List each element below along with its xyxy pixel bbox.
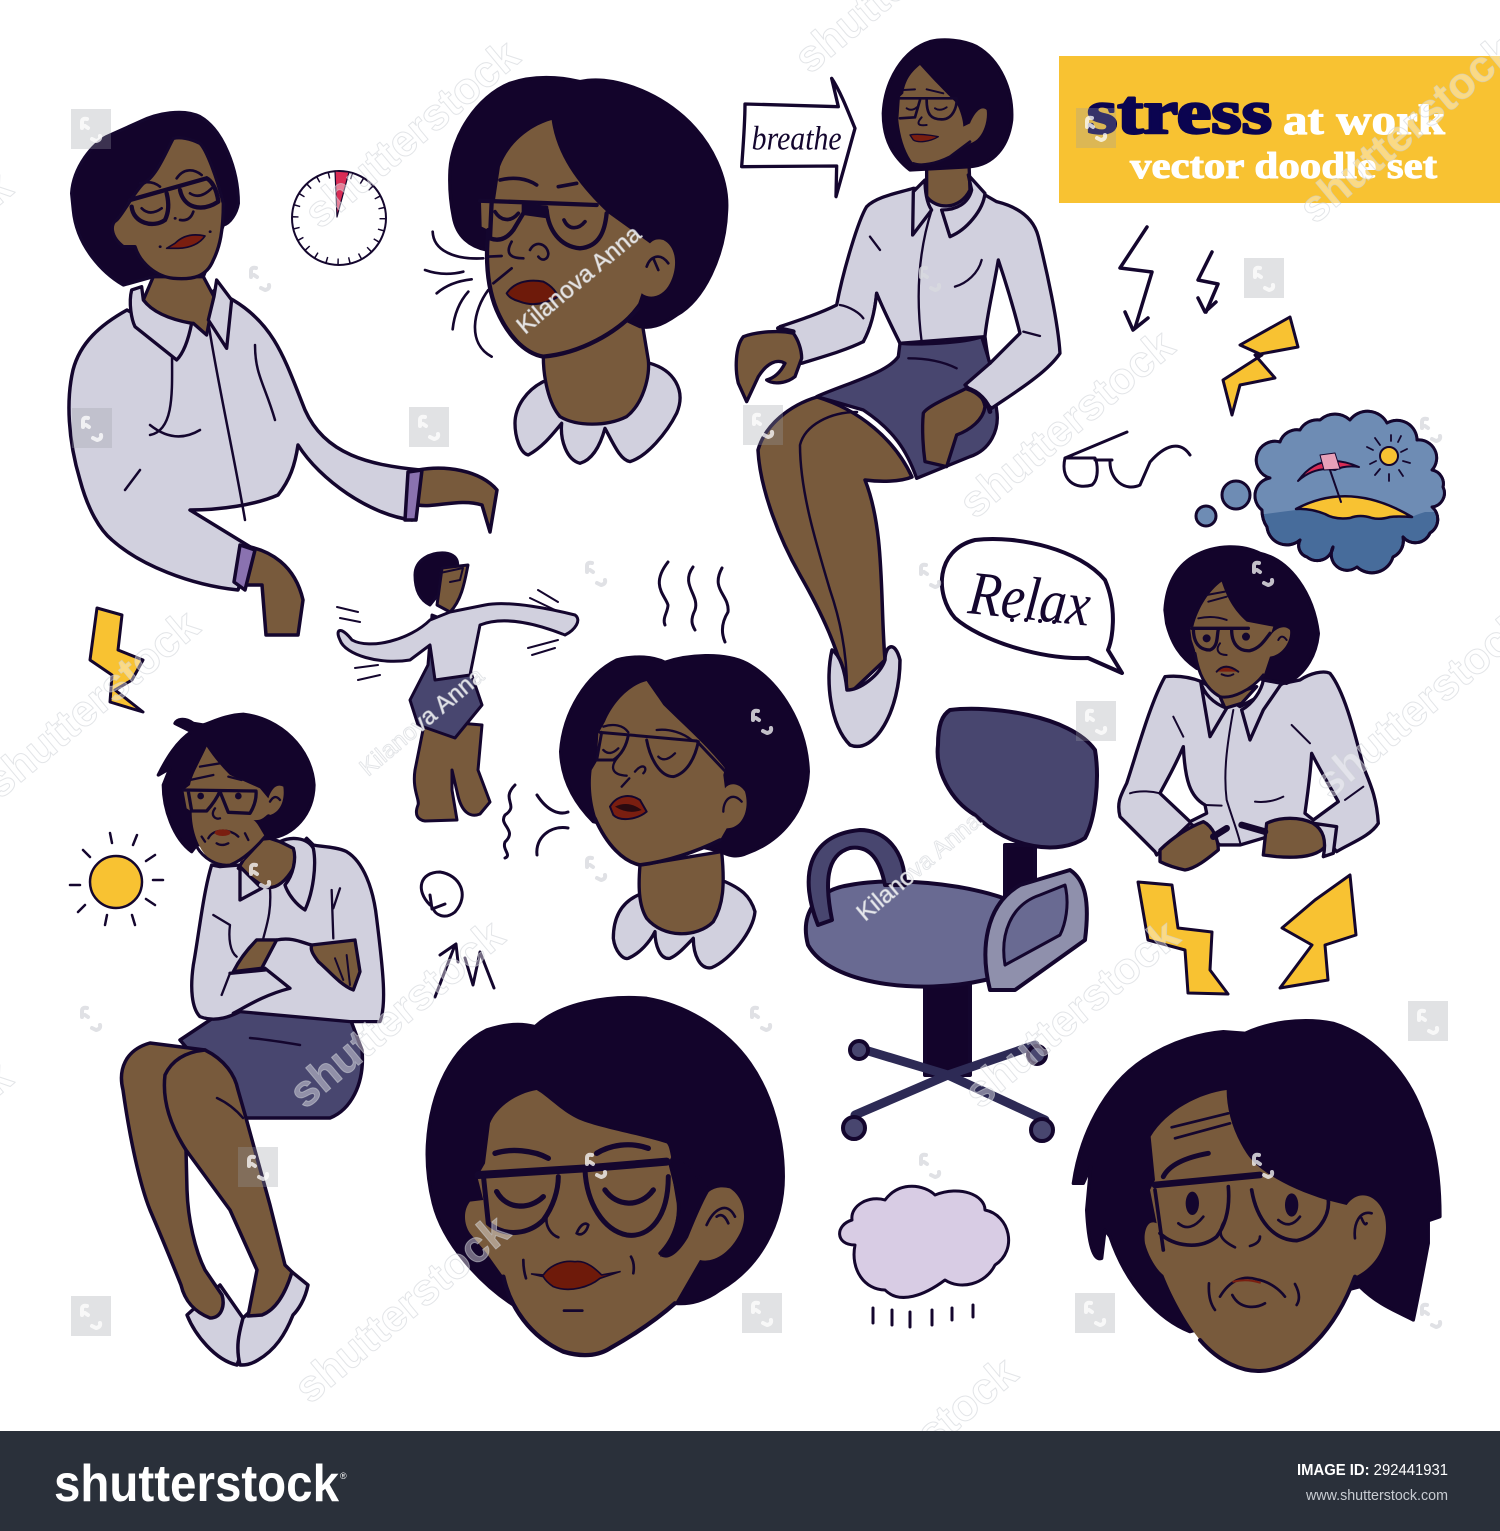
icon: sun <box>70 833 163 925</box>
footer bar: ® <box>340 1471 347 1481</box>
character: seated woman with crossed arms <box>121 714 384 1365</box>
panel: title banner: stress <box>1087 79 1272 147</box>
panel: title banner: vector doodle set <box>1130 146 1438 187</box>
character: small woman waving arms <box>337 553 578 821</box>
watermark stamps <box>71 108 1448 1336</box>
icon: office chair <box>806 709 1097 1141</box>
icon: breath marks <box>503 785 568 858</box>
panel: title banner <box>1059 56 1500 203</box>
watermarks: shutterstock <box>295 30 529 238</box>
icon: lightning bolt left <box>90 608 143 712</box>
speech bubble: Relax: Relax <box>965 559 1094 640</box>
icon: lightning bolts below desk woman <box>1138 875 1356 994</box>
footer bar: IMAGE ID: 292441931 <box>1297 1462 1448 1479</box>
watermarks: shutterstock <box>950 320 1184 528</box>
speech bubble: Relax <box>942 539 1122 673</box>
footer bar <box>0 1431 1500 1531</box>
character: stressed woman at desk <box>1119 547 1378 870</box>
watermarks: shutterstock <box>280 910 514 1118</box>
panel: title banner: at work <box>1283 98 1446 144</box>
icon: glasses <box>1064 432 1190 487</box>
icon: spiral and up arrows <box>421 872 494 997</box>
character: woman with hands hanging, eyes closed <box>69 112 497 635</box>
icon: rain cloud <box>840 1186 1009 1327</box>
character: large worried head <box>1073 1021 1440 1371</box>
watermarks: Kilanova Anna <box>512 220 647 340</box>
icon: zigzag arrows <box>1120 227 1218 330</box>
footer bar: shutterstock <box>54 1455 339 1513</box>
footer bar: www.shutterstock.com <box>1305 1487 1448 1504</box>
watermarks: shutterstock <box>955 910 1189 1118</box>
watermarks: Kilanova Anna <box>355 662 490 782</box>
icon: thought cloud with beach <box>1196 400 1450 573</box>
character: large head with closed eyes <box>427 998 783 1355</box>
watermarks: shutterstock <box>285 1205 519 1413</box>
sign: breathe arrow <box>742 78 855 197</box>
sign: breathe arrow: breathe <box>752 120 842 157</box>
icon: clock <box>292 171 386 265</box>
character: head breathing out, profile tilted <box>425 77 727 463</box>
watermarks: Kilanova Anna <box>852 807 987 927</box>
icon: lightning bolt upper right <box>1223 317 1298 415</box>
character: head exhaling <box>561 656 808 968</box>
character: seated woman with crossed legs <box>736 40 1060 746</box>
icon: steam squiggles <box>659 562 728 642</box>
